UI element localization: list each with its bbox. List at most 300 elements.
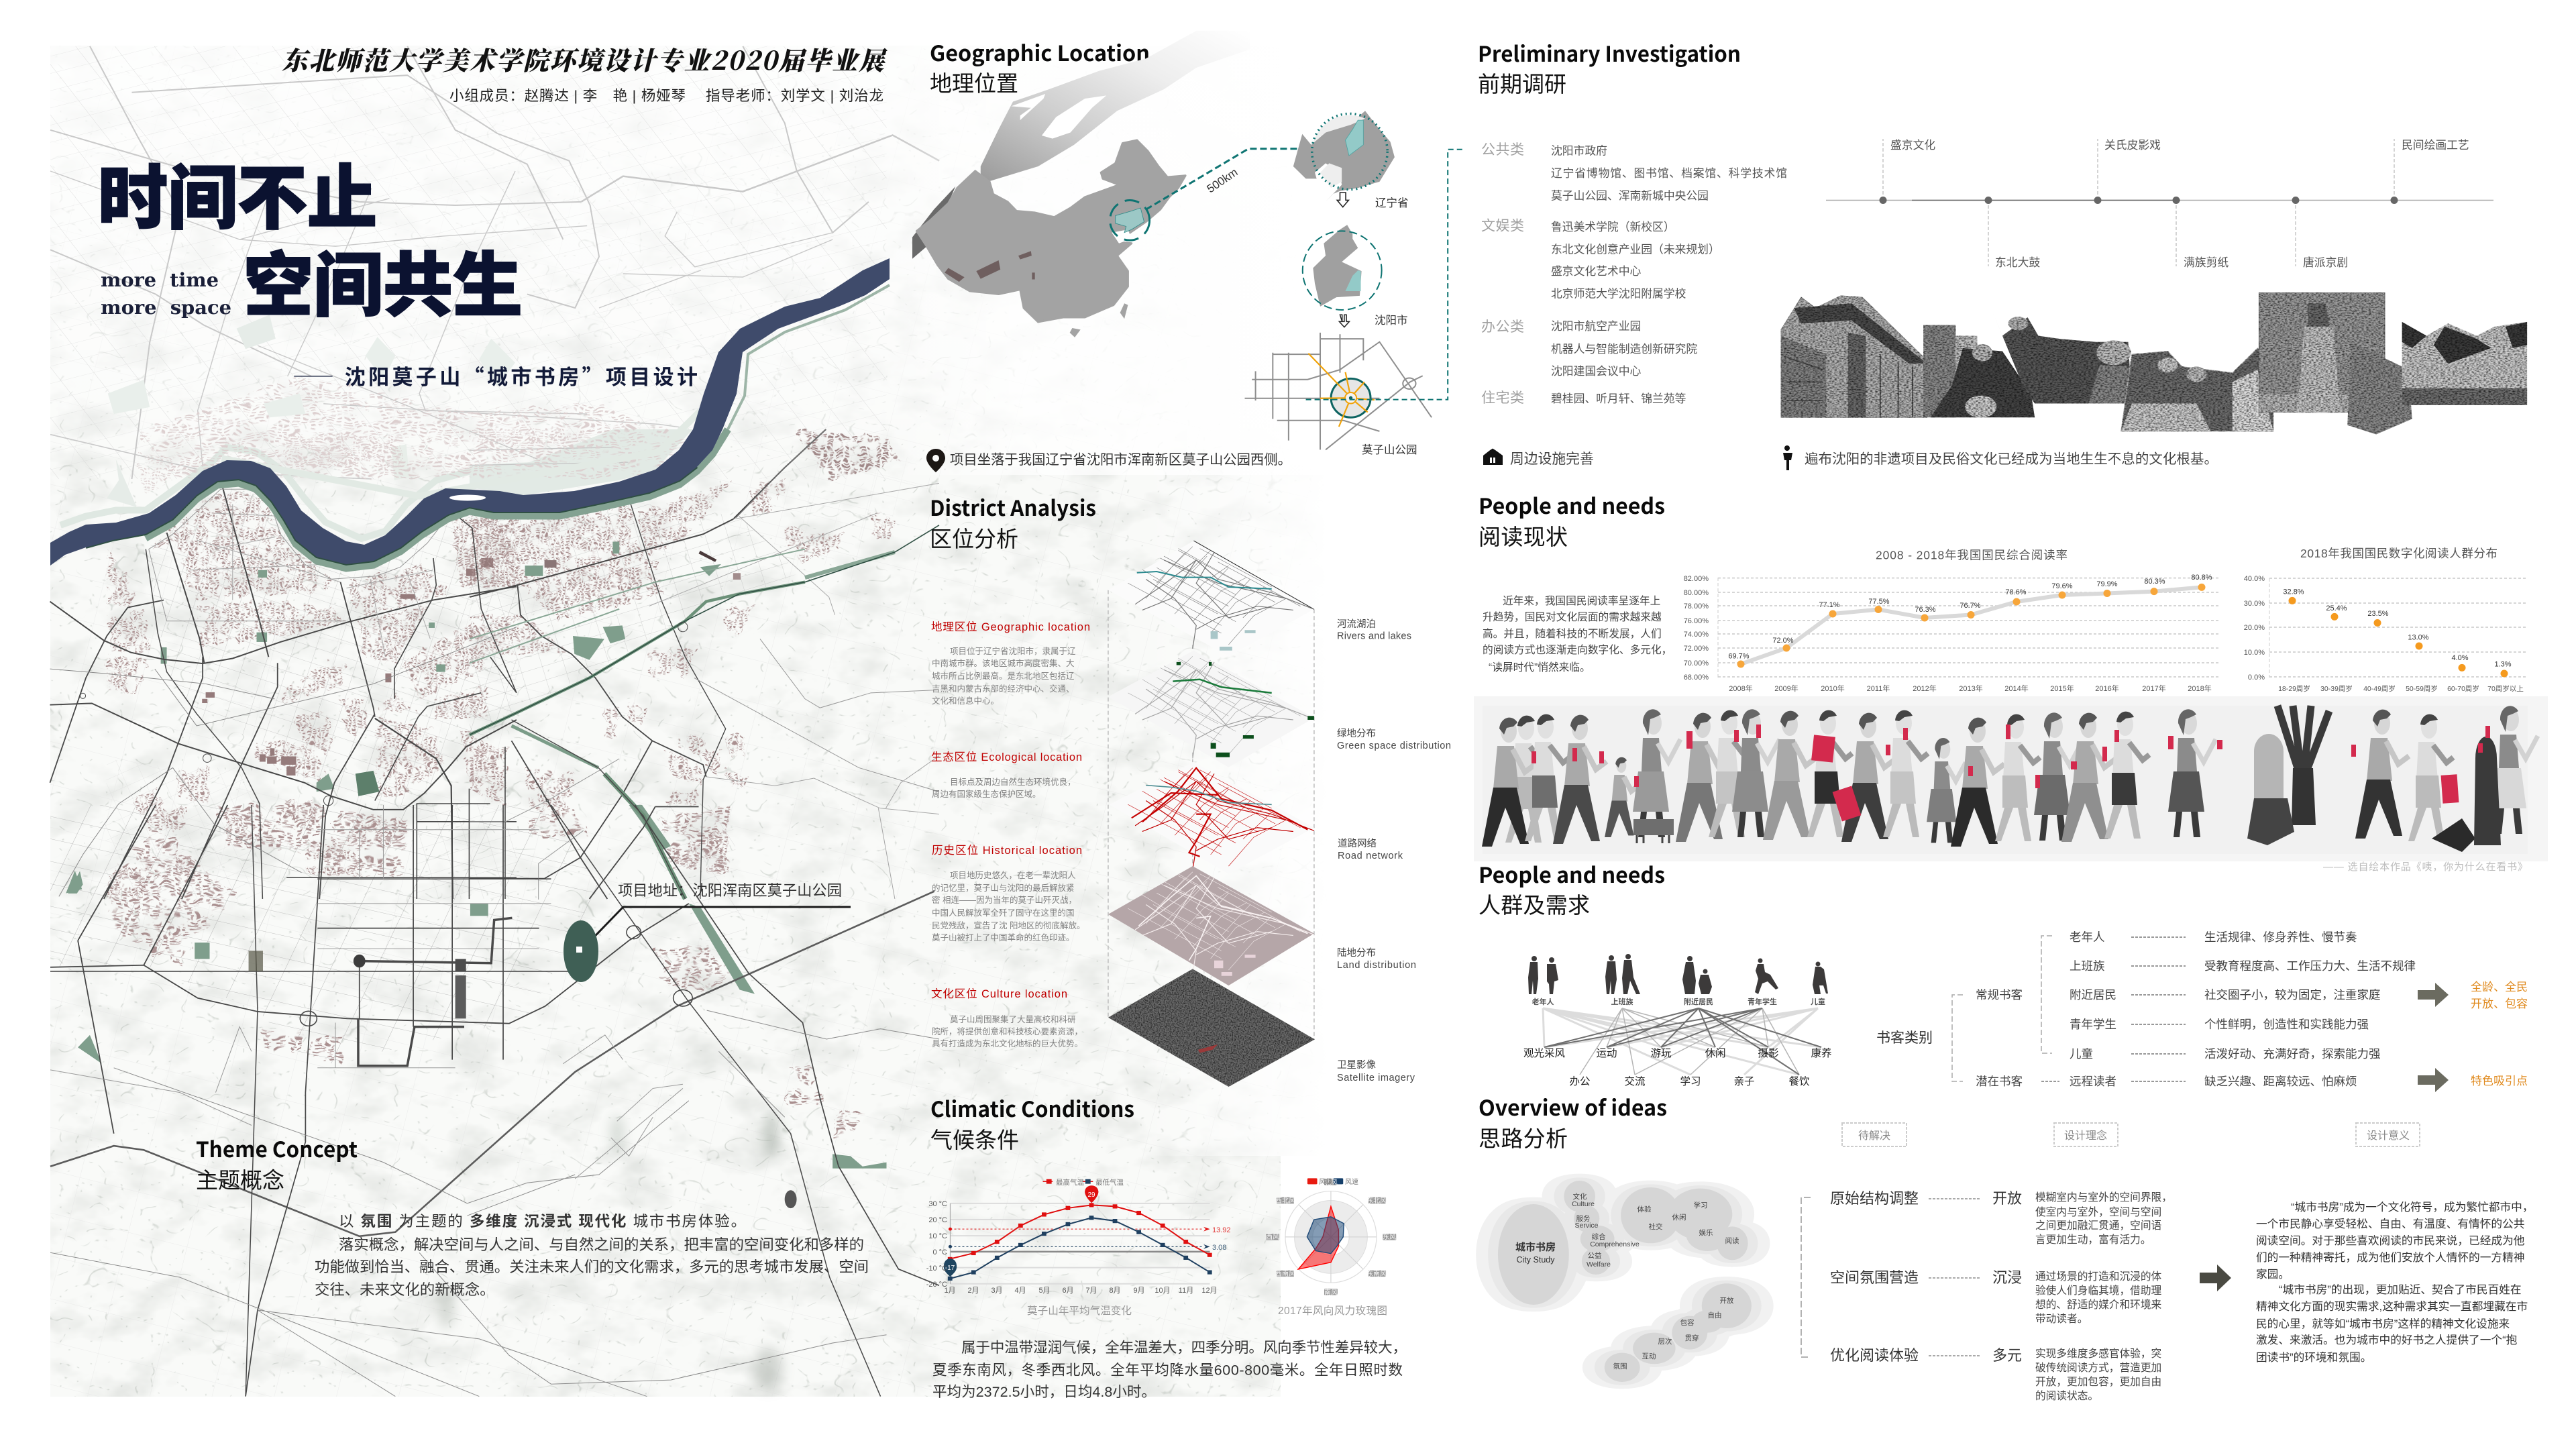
- layer: green space: [1108, 651, 1314, 767]
- heading cn: 区位分析: [930, 521, 1018, 553]
- design significance paragraph: 激发、来激活。也为城市中的好书之人提供了一个“抱: [2256, 1334, 2518, 1346]
- category tree: 上班族: [2070, 959, 2105, 973]
- theme concept: [196, 1133, 869, 1298]
- heading cn: 主题概念: [196, 1163, 284, 1195]
- concept bubbles: [1498, 1181, 1752, 1382]
- line chart: reading rate: 79.6%: [2051, 582, 2073, 590]
- concept bubbles: Service: [1574, 1222, 1599, 1230]
- idea structure: [1801, 1190, 2172, 1402]
- facility categories: 沈阳建国会议中心: [1551, 365, 1641, 378]
- design significance paragraph: 精神文化方面的现实需求,这种需求其实一直都埋藏在市: [2256, 1300, 2528, 1313]
- concept bubbles: 阅读: [1725, 1236, 1739, 1245]
- distance label: 500km: [1205, 166, 1240, 195]
- heading cn: 地理位置: [930, 66, 1018, 98]
- district network: [1245, 333, 1432, 449]
- river island: [449, 495, 486, 500]
- reading paragraph: [1483, 595, 1672, 674]
- panel: reading status: [1474, 490, 2548, 873]
- temperature line chart: 7月: [1085, 1287, 1097, 1295]
- facility categories: [1481, 142, 1787, 406]
- facility categories: 办公类: [1481, 319, 1524, 335]
- column tags: 待解决: [1858, 1130, 1890, 1142]
- figures: [1482, 706, 2538, 852]
- ecological text: 目标点及周边自然生态环境优良，: [950, 777, 1076, 787]
- concept bubbles: Culture: [1572, 1200, 1595, 1208]
- dot chart: digital readers: 13.0%: [2408, 633, 2429, 641]
- people labels: [1532, 997, 1825, 1006]
- wind rose chart: 风速: [1345, 1178, 1358, 1186]
- line chart: reading rate: 78.00%: [1684, 602, 1709, 610]
- geographic text: 地理区位 Geographic location: [931, 621, 1090, 633]
- column tags: 设计意义: [2367, 1129, 2410, 1142]
- heading cn: 气候条件: [930, 1122, 1019, 1155]
- concept bubbles: 贯穿: [1685, 1334, 1699, 1342]
- culture timeline: 满族剪纸: [2184, 256, 2229, 269]
- category tree: 潜在书客: [1976, 1075, 2023, 1088]
- theme paragraph: 交往、未来文化的新概念。: [315, 1281, 495, 1298]
- location note: 项目坐落于我国辽宁省沈阳市浑南新区莫子山公园西侧。: [950, 452, 1291, 468]
- line chart: reading rate: 2010年: [1821, 684, 1845, 693]
- layer labels: Green space distribution: [1337, 741, 1451, 751]
- dot chart: digital readers: 40.0%: [2244, 575, 2265, 583]
- icon: house: [1483, 448, 1503, 465]
- culture text: 院所，将提供创意和科技核心要素资源，: [932, 1026, 1083, 1036]
- site address callout: [564, 882, 851, 982]
- layer: satellite: [1108, 969, 1315, 1087]
- main title line 2: 空间共生: [244, 229, 523, 330]
- dot chart: digital readers: 60-70周岁: [2447, 684, 2479, 693]
- line chart: reading rate: 76.3%: [1915, 606, 1936, 614]
- facility categories: 沈阳市政府: [1551, 145, 1607, 157]
- design significance paragraph: 一个市民静心享受轻松、自由、有温度、有情怀的公共: [2256, 1218, 2525, 1230]
- reader categories: 书客类别: [1876, 1030, 1933, 1046]
- climate paragraph: 属于中温带湿润气候，全年温差大，四季分明。风向季节性差异较大，: [961, 1340, 1407, 1356]
- dot chart: digital readers: 0.0%: [2248, 674, 2265, 682]
- conclusions: 特色吸引点: [2471, 1075, 2528, 1087]
- temperature line chart: 1月: [944, 1287, 956, 1295]
- category tree: 老年人: [2070, 930, 2105, 944]
- idea structure: 开放: [1992, 1190, 2022, 1207]
- design significance paragraph: “城市书房”的出现，更加贴近、契合了市民百姓在: [2279, 1283, 2522, 1296]
- panel: climatic conditions: [926, 1093, 1407, 1400]
- layer labels: Land distribution: [1337, 960, 1416, 971]
- facility categories: 东北文化创意产业园（未来规划）: [1551, 243, 1720, 256]
- line chart: reading rate: 2011年: [1867, 684, 1890, 693]
- facility categories: 北京师范大学沈阳附属学校: [1551, 287, 1686, 301]
- reading paragraph: “读屏时代”悄然来临。: [1489, 661, 1591, 674]
- culture timeline: [1826, 139, 2493, 269]
- arrow liaoning to shenyang: [1337, 193, 1348, 207]
- reading paragraph: 升趋势，国民对文化层面的需求越来越: [1483, 611, 1662, 623]
- north city faded streets: [50, 46, 939, 479]
- location maps: [912, 31, 1464, 449]
- demand network: [1543, 1008, 1821, 1075]
- facility categories: 辽宁省博物馆、图书馆、档案馆、科学技术馆: [1551, 167, 1787, 180]
- people labels: 上班族: [1611, 997, 1633, 1006]
- concept bubbles: 综合: [1591, 1232, 1606, 1241]
- line chart: reading rate: 82.00%: [1684, 575, 1709, 583]
- concept bubbles: 互动: [1642, 1352, 1656, 1360]
- demand labels: 休闲: [1705, 1047, 1726, 1059]
- concept bubbles: 公益: [1587, 1251, 1602, 1260]
- temperature line chart: 3月: [991, 1287, 1003, 1295]
- demand labels: 康养: [1811, 1047, 1832, 1059]
- layer labels: 道路网络: [1338, 838, 1377, 849]
- idea structure: 使室内与室外，空间与空间: [2035, 1206, 2161, 1218]
- temperature line chart: 30 °C: [928, 1200, 947, 1208]
- plant and seated reader: [2277, 706, 2329, 768]
- concept bubbles: 氛围: [1613, 1362, 1627, 1371]
- stacked layers diagram: [1108, 541, 1315, 1087]
- line chart: reading rate: 76.7%: [1960, 602, 1981, 610]
- project title band: [98, 40, 888, 390]
- arrow shenyang to district: [1339, 315, 1349, 327]
- concept bubbles: 层次: [1658, 1337, 1672, 1346]
- layer labels: 绿地分布: [1337, 728, 1376, 739]
- dot chart: digital readers: 40-49周岁: [2363, 684, 2396, 693]
- design significance paragraph: [2256, 1201, 2534, 1364]
- line chart: reading rate: 74.00%: [1684, 631, 1709, 639]
- facility categories: 住宅类: [1481, 390, 1524, 406]
- theme paragraph: [315, 1213, 869, 1298]
- category tree: 儿童: [2070, 1047, 2093, 1061]
- climate paragraph: 平均为2372.5小时，日均4.8小时。: [932, 1384, 1156, 1400]
- temperature line chart: 20 °C: [928, 1216, 947, 1224]
- design significance paragraph: 家园。: [2256, 1268, 2290, 1281]
- reading paragraph: 的阅读方式也逐渐走向数字化、多元化，: [1483, 644, 1672, 656]
- concept bubbles: Comprehensive: [1590, 1240, 1640, 1248]
- temperature line chart: 6月: [1062, 1287, 1074, 1295]
- layer labels: 河流湖泊: [1337, 619, 1376, 630]
- heading: Climatic Conditions: [930, 1093, 1134, 1124]
- heading cn: 前期调研: [1478, 66, 1566, 99]
- line chart: reading rate: 2016年: [2095, 684, 2119, 693]
- conclusions: 全龄、全民: [2471, 981, 2528, 994]
- layer labels: 卫星影像: [1337, 1059, 1376, 1071]
- category tree: 远程读者: [2070, 1075, 2116, 1088]
- concept bubbles: 城市书房: [1515, 1241, 1556, 1253]
- dot chart: digital readers: 10.0%: [2244, 649, 2265, 657]
- geographic text: 城市所占比例最高。是东北地区包括辽: [932, 671, 1075, 681]
- historical text: [932, 844, 1085, 943]
- temperature line chart: 12月: [1201, 1287, 1218, 1295]
- category tree: 受教育程度高、工作压力大、生活不规律: [2204, 959, 2416, 973]
- line chart: reading rate: 2009年: [1774, 684, 1799, 693]
- temperature line chart: 3.08: [1212, 1244, 1226, 1252]
- dot chart: digital readers: 50-59周岁: [2406, 684, 2438, 693]
- category tree: 常规书客: [1976, 988, 2023, 1002]
- wind rose chart: 东南风: [1366, 1269, 1387, 1278]
- concept bubbles: 休闲: [1672, 1213, 1686, 1222]
- line chart: reading rate: 2008 - 2018年我国国民综合阅读率: [1876, 549, 2068, 562]
- demand labels: 餐饮: [1788, 1075, 1810, 1087]
- demand labels: [1523, 1047, 1832, 1087]
- column tags: [1842, 1123, 2420, 1146]
- layer: rivers: [1108, 541, 1314, 656]
- historical text: 民党残敌，宣告了沈 阳地区的彻底解放。: [932, 920, 1085, 930]
- facility categories: 文娱类: [1481, 219, 1524, 233]
- theme paragraph: 落实概念，解决空间与人之间、与自然之间的关系，把丰富的空间变化和多样的: [339, 1236, 864, 1253]
- demand labels: 运动: [1596, 1047, 1617, 1059]
- reading paragraph: 高。并且，随着科技的不断发展，人们: [1483, 628, 1662, 640]
- people labels: 老年人: [1532, 997, 1554, 1006]
- concept bubbles: 娱乐: [1699, 1228, 1713, 1237]
- culture text: [931, 987, 1083, 1049]
- map captions: 辽宁省: [1375, 197, 1409, 209]
- facility categories: 鲁迅美术学院（新校区）: [1551, 221, 1675, 233]
- idea structure: 沉浸: [1992, 1269, 2022, 1286]
- reading paragraph: 近年来，我国国民阅读率呈逐年上: [1503, 595, 1660, 607]
- layer labels: Road network: [1338, 851, 1403, 861]
- people silhouettes: [1528, 954, 1828, 994]
- line chart: reading rate: 2014年: [2004, 684, 2029, 693]
- idea structure: 想的、舒适的媒介和环境来: [2035, 1298, 2162, 1311]
- wind rose chart: 东北风: [1366, 1196, 1387, 1205]
- culture timeline: 盛京文化: [1890, 139, 1935, 152]
- temperature line chart: 10月: [1155, 1287, 1171, 1295]
- people labels: 儿童: [1811, 997, 1825, 1006]
- temperature line chart: 10 °C: [928, 1232, 947, 1240]
- concept bubbles: Welfare: [1587, 1260, 1611, 1269]
- demand labels: 学习: [1680, 1075, 1701, 1087]
- line chart: reading rate: 80.8%: [2191, 574, 2212, 582]
- heading: People and needs: [1479, 490, 1665, 521]
- climate paragraph: [932, 1340, 1407, 1400]
- arrow: regular readers: [2418, 983, 2449, 1007]
- line chart: reading rate: 2017年: [2142, 684, 2166, 693]
- facility categories: 盛京文化艺术中心: [1551, 265, 1641, 278]
- red phones and books: [1532, 724, 2490, 822]
- historical text: 中国人民解放军全歼了固守在这里的国: [932, 908, 1075, 918]
- design significance paragraph: 团读书”的环境和氛围。: [2256, 1351, 2371, 1364]
- facility categories: 公共类: [1481, 142, 1524, 158]
- category tree: 附近居民: [2070, 988, 2116, 1002]
- concept bubbles: City Study: [1517, 1255, 1555, 1265]
- idea structure: 空间氛围营造: [1830, 1269, 1919, 1286]
- category tree: 生活规律、修身养性、慢节奏: [2204, 930, 2357, 944]
- demand labels: 摄影: [1758, 1047, 1779, 1059]
- english slogan 2: more space: [101, 297, 231, 319]
- heading: Overview of ideas: [1479, 1091, 1667, 1122]
- dot chart: digital readers: 1.3%: [2494, 660, 2512, 668]
- dot chart: digital readers: 23.5%: [2367, 610, 2389, 618]
- wind rose chart: 西风: [1266, 1233, 1279, 1241]
- temperature line chart: 最高气温: [1056, 1178, 1084, 1187]
- panel: geographic location: [912, 31, 1464, 472]
- theme paragraph: 以 氛围 为主题的 多维度 沉浸式 现代化 城市书房体验。: [339, 1213, 746, 1230]
- temperature line chart: -17: [945, 1265, 955, 1272]
- geographic text: [931, 621, 1090, 706]
- ecological text: 生态区位 Ecological location: [931, 751, 1082, 763]
- temperature line chart: 4月: [1014, 1287, 1026, 1295]
- wind rose chart: 风级: [1319, 1178, 1332, 1186]
- line chart: reading rate: 77.1%: [1819, 601, 1840, 609]
- geographic text: 吉黑和内蒙古东部的经济中心、交通、: [932, 684, 1075, 694]
- dot chart: digital readers: 18-29周岁: [2278, 684, 2310, 693]
- team members: 小组成员：赵腾达 | 李 艳 | 杨娅琴 指导老师：刘学文 | 刘治龙: [449, 88, 883, 104]
- dot chart: digital readers: 70周岁以上: [2487, 684, 2524, 693]
- ecological text: [931, 751, 1082, 799]
- wind rose chart: 南风: [1324, 1288, 1338, 1297]
- idea structure: 带动读者。: [2035, 1313, 2088, 1325]
- category tree: 缺乏兴趣、距离较远、怕麻烦: [2204, 1075, 2357, 1088]
- line chart: reading rate: 2015年: [2050, 684, 2074, 693]
- category tree: [1952, 930, 2416, 1088]
- heading: District Analysis: [930, 492, 1096, 523]
- wind rose chart: 北风: [1324, 1179, 1338, 1187]
- facility categories: 碧桂园、听月轩、锦兰苑等: [1551, 392, 1686, 405]
- idea structure: 破传统阅读方式，营造更加: [2035, 1362, 2161, 1374]
- temperature line chart: -10 °C: [926, 1265, 947, 1273]
- historical text: 项目地历史悠久，在老一辈沈阳人: [950, 870, 1076, 880]
- temperature line chart: 9月: [1133, 1287, 1145, 1295]
- line chart: reading rate: 79.9%: [2096, 580, 2118, 588]
- idea structure: 实现多维度多感官体验，突: [2035, 1348, 2162, 1360]
- wind rose chart: 东风: [1383, 1232, 1396, 1241]
- english slogan 1: more time: [101, 269, 219, 291]
- heading: People and needs: [1479, 859, 1665, 890]
- demand labels: 亲子: [1733, 1075, 1755, 1087]
- demand labels: 游玩: [1650, 1047, 1672, 1059]
- line chart: reading rate: 76.00%: [1684, 617, 1709, 625]
- culture timeline: 东北大鼓: [1995, 256, 2040, 269]
- geographic text: 文化和信息中心。: [932, 696, 999, 706]
- temperature line chart: -20 °C: [926, 1281, 947, 1289]
- historical text: 历史区位 Historical location: [932, 844, 1082, 857]
- line chart: reading rate: 78.6%: [2005, 588, 2027, 596]
- heading: Theme Concept: [196, 1133, 358, 1164]
- exhibition title: 东北师范大学美术学院环境设计专业2020届毕业展: [282, 40, 888, 77]
- temperature line chart: 0 °C: [932, 1248, 947, 1256]
- urban blocks west: [104, 489, 517, 896]
- dot chart: digital readers: 30-39周岁: [2320, 684, 2353, 693]
- arrow: potential readers: [2418, 1068, 2449, 1092]
- layer labels: Satellite imagery: [1337, 1073, 1415, 1083]
- icon: location pin: [926, 449, 945, 472]
- facility categories: 莫子山公园、浑南新城中央公园: [1551, 189, 1709, 203]
- temperature line chart: 最低气温: [1095, 1178, 1124, 1187]
- wind rose chart: [1266, 1178, 1396, 1297]
- dot chart: digital readers: 30.0%: [2244, 600, 2265, 608]
- river Hun: [50, 258, 890, 566]
- conclusions: [2471, 981, 2528, 1087]
- layer labels: Rivers and lakes: [1337, 631, 1411, 641]
- design significance paragraph: “城市书房”成为一个文化符号，成为繁忙都市中，: [2291, 1201, 2534, 1214]
- heading cn: 思路分析: [1479, 1121, 1568, 1153]
- illustration strip: readers walking: [1474, 696, 2548, 861]
- icon: person: [1782, 445, 1792, 470]
- temperature line chart: 2月: [967, 1287, 979, 1295]
- category tree: 个性鲜明，创造性和实践能力强: [2204, 1018, 2369, 1031]
- dot chart: digital readers: 20.0%: [2244, 624, 2265, 632]
- arrow: to significance: [2200, 1265, 2231, 1291]
- facility categories: 机器人与智能制造创新研究院: [1551, 343, 1697, 356]
- demand labels: 交流: [1624, 1075, 1646, 1087]
- concept bubbles: 体验: [1637, 1205, 1652, 1214]
- line chart: reading rate: 2013年: [1959, 684, 1983, 693]
- main title line 1: 时间不止: [98, 142, 377, 243]
- concept bubbles: 自由: [1708, 1311, 1721, 1320]
- dot chart: digital readers: 4.0%: [2451, 654, 2469, 662]
- temperature line chart: 29: [1087, 1191, 1095, 1199]
- panel: preliminary investigation: [1478, 38, 2527, 470]
- culture text: 莫子山周围聚集了大量高校和科研: [950, 1014, 1076, 1024]
- idea structure: 通过场景的打造和沉浸的体: [2035, 1271, 2162, 1283]
- climate paragraph: 夏季东南风，冬季西北风。全年平均降水量600-800毫米。全年日照时数: [932, 1362, 1403, 1378]
- concept bubbles: 社交: [1649, 1222, 1663, 1231]
- layer: land: [1108, 866, 1314, 985]
- idea structure: 言更加生动，富有活力。: [2035, 1234, 2151, 1246]
- idea structure: 原始结构调整: [1830, 1190, 1919, 1207]
- design significance paragraph: 民的心里，就等如“城市书房”这样的精神文化设施来: [2256, 1318, 2510, 1330]
- people labels: 青年学生: [1748, 997, 1777, 1006]
- culture timeline: 民间绘画工艺: [2402, 139, 2469, 152]
- concept bubbles: 包容: [1680, 1318, 1695, 1327]
- facilities note: 周边设施完善: [1510, 451, 1594, 467]
- concept bubbles: 服务: [1576, 1214, 1591, 1223]
- layer labels: 陆地分布: [1337, 947, 1376, 959]
- temperature line chart: 8月: [1109, 1287, 1121, 1295]
- panel: district analysis: [930, 492, 1451, 1087]
- site map background: [50, 46, 1334, 1401]
- category tree: 青年学生: [2070, 1018, 2116, 1031]
- river Hun south bank greenery: [86, 285, 890, 568]
- culture timeline: 关氏皮影戏: [2104, 139, 2161, 152]
- panel: people and needs: [1479, 859, 2528, 1092]
- main road network: [50, 480, 517, 899]
- temperature line chart: [926, 1178, 1231, 1295]
- design significance paragraph: 阅读空间。对于那些喜欢阅读的市民来说，已经成为他: [2256, 1234, 2525, 1247]
- category tree: 社交圈子小，较为固定，注重家庭: [2204, 988, 2380, 1002]
- dot chart: digital readers: 25.4%: [2326, 604, 2347, 612]
- line chart: reading rate: 80.00%: [1684, 589, 1709, 597]
- theme paragraph: 功能做到恰当、融合、贯通。关注未来人们的文化需求，多元的思考城市发展、空间: [315, 1258, 869, 1275]
- design significance paragraph: 们的一种精神寄托，成为他们安放个人情怀的一方精神: [2256, 1251, 2525, 1264]
- concept bubbles: 文化: [1572, 1192, 1587, 1201]
- column tags: 设计理念: [2064, 1129, 2107, 1142]
- liaoning map: [1293, 111, 1395, 202]
- panel: overview of ideas: [1479, 1091, 2534, 1402]
- line chart: reading rate: 68.00%: [1684, 674, 1709, 682]
- line chart: reading rate: 72.00%: [1684, 645, 1709, 653]
- park caption: 莫子山公园: [1362, 443, 1417, 456]
- line chart: reading rate: 2008年: [1729, 684, 1753, 693]
- line chart: reading rate: 69.7%: [1728, 652, 1750, 660]
- concept bubbles: 开放: [1720, 1296, 1734, 1305]
- temperature line chart: 11月: [1179, 1287, 1193, 1295]
- site address callout: 项目地址：沈阳浑南区莫子山公园: [618, 882, 842, 899]
- culture text: 文化区位 Culture location: [931, 987, 1067, 1000]
- idea structure: 验使人们身临其境，借助理: [2035, 1284, 2162, 1297]
- historical text: 莫子山被打上了中国革命的红色印迹。: [932, 932, 1075, 943]
- street grids of the south city: [104, 486, 517, 899]
- shenyang caption: 沈阳市: [1375, 314, 1407, 327]
- china map: [916, 140, 1185, 322]
- project subtitle: —— 沈阳莫子山“城市书房”项目设计: [292, 360, 698, 390]
- culture text: 具有打造成为东北文化地标的巨大优势。: [932, 1038, 1083, 1049]
- line chart: reading rate: [1684, 549, 2218, 693]
- wind rose chart: 西南风: [1275, 1269, 1295, 1278]
- chart captions: 莫子山年平均气温变化: [1027, 1305, 1132, 1317]
- geographic text: 中南城市群。该地区城市高度密集、大: [932, 658, 1075, 668]
- idea structure: 多元: [1992, 1347, 2022, 1364]
- conclusions: 开放、包容: [2471, 998, 2528, 1010]
- pale flood corridor north of river: [60, 432, 517, 539]
- historical text: 的记忆里，莫子山与沈阳的最后解放紧: [932, 883, 1075, 893]
- idea structure: 之间更加融汇贯通，空间语: [2035, 1220, 2162, 1232]
- line chart: reading rate: 2018年: [2188, 684, 2212, 693]
- line chart: reading rate: 77.5%: [1868, 598, 1890, 606]
